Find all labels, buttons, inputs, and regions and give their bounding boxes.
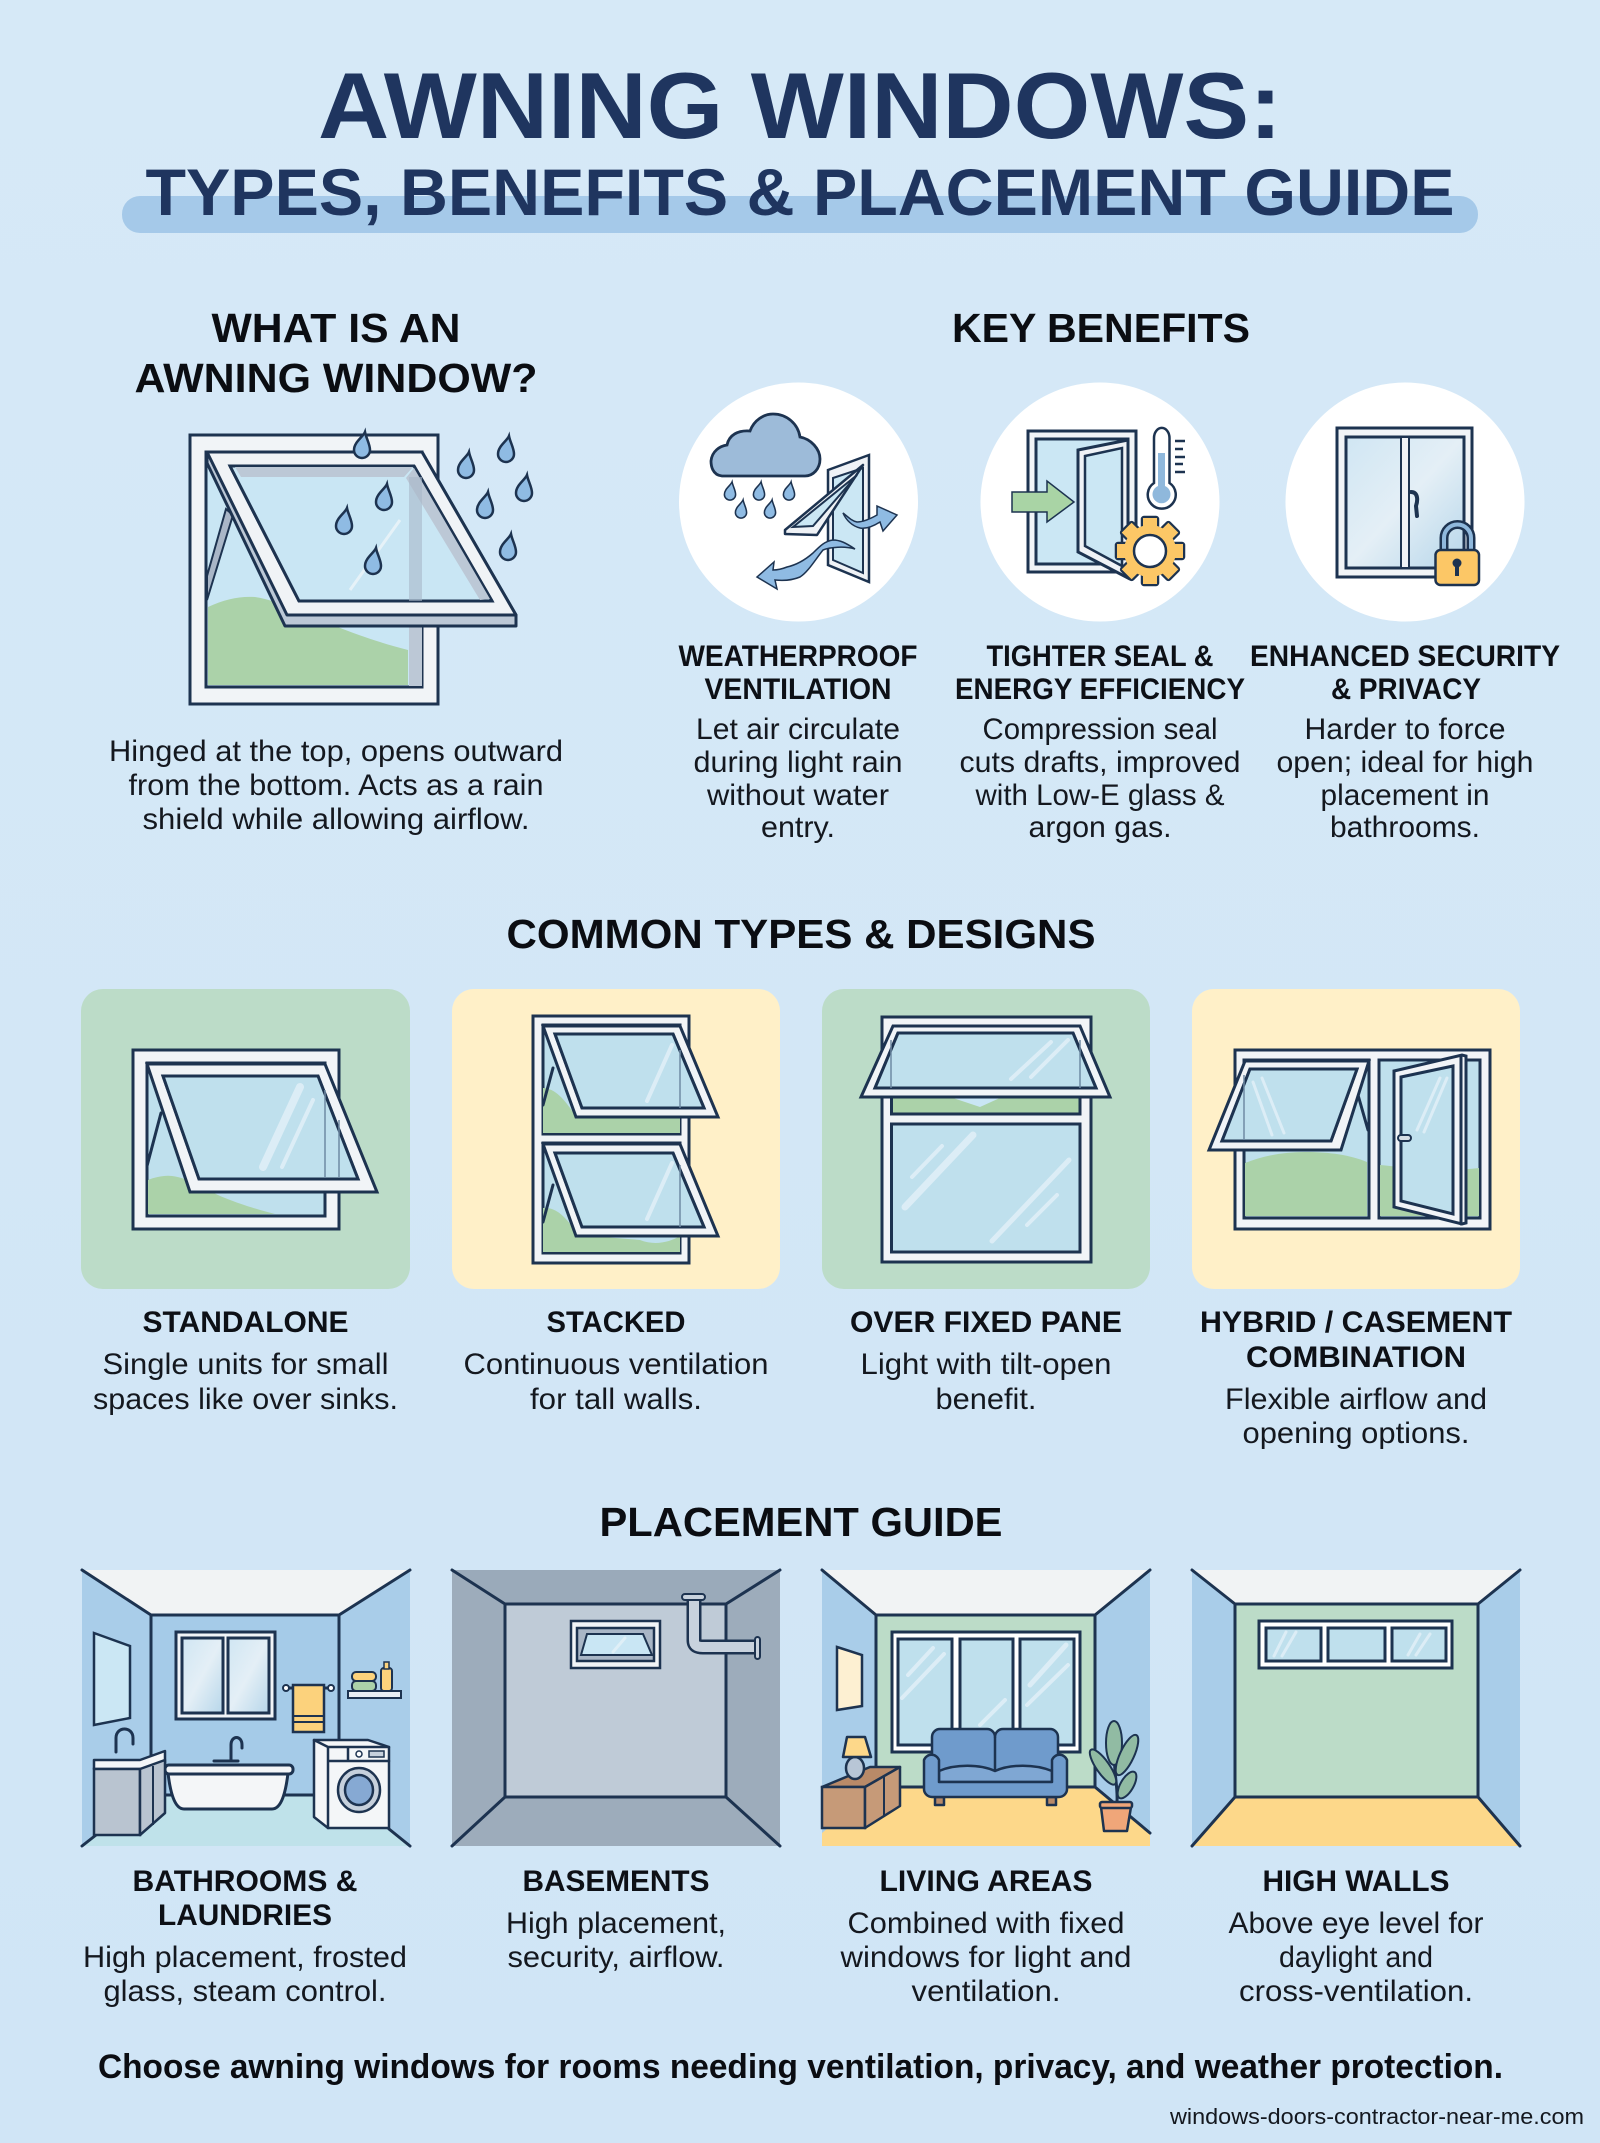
benefit: weatherproof ventilation bbox=[678, 382, 918, 844]
mirror bbox=[94, 1633, 130, 1725]
label: WEATHERPROOF bbox=[678, 640, 918, 673]
description: High placement, frosted bbox=[83, 1941, 407, 1974]
description: Above eye level for bbox=[1228, 1907, 1484, 1940]
label: STANDALONE bbox=[142, 1306, 348, 1339]
label: COMBINATION bbox=[1246, 1341, 1466, 1374]
window illustration bbox=[1209, 1050, 1490, 1229]
description bbox=[464, 1348, 768, 1416]
benefit: tighter seal and energy efficiency bbox=[955, 382, 1245, 844]
card background bbox=[81, 989, 410, 1289]
label bbox=[1250, 640, 1560, 706]
description bbox=[839, 1907, 1132, 2008]
type card: standalone bbox=[81, 989, 410, 1416]
description: with Low-E glass & bbox=[975, 779, 1224, 812]
frosted window bbox=[176, 1632, 275, 1719]
placement: living areas bbox=[822, 1570, 1150, 2008]
description: Flexible airflow and bbox=[1225, 1383, 1487, 1416]
icon: frosted window and padlock bbox=[1286, 382, 1524, 622]
label bbox=[132, 1865, 358, 1932]
description bbox=[1276, 713, 1534, 844]
description: entry. bbox=[761, 811, 835, 844]
description: from the bottom. Acts as a rain bbox=[128, 769, 544, 802]
footer takeaway: Choose awning windows for rooms needing ventilation, privacy, and weather protection. bbox=[98, 2048, 1503, 2086]
description: Let air circulate bbox=[696, 713, 900, 746]
label: HIGH WALLS bbox=[1262, 1865, 1450, 1898]
description: spaces like over sinks. bbox=[93, 1383, 398, 1416]
label: BATHROOMS & bbox=[132, 1865, 358, 1898]
description: Light with tilt-open bbox=[860, 1348, 1112, 1381]
washing machine bbox=[314, 1740, 389, 1828]
source url: windows-doors-contractor-near-me.com bbox=[1169, 2104, 1584, 2129]
label: STACKED bbox=[546, 1306, 686, 1339]
label bbox=[678, 640, 918, 706]
placement: high walls bbox=[1192, 1570, 1520, 2008]
description: Harder to force bbox=[1304, 713, 1506, 746]
description: opening options. bbox=[1242, 1417, 1470, 1450]
picture bbox=[837, 1647, 862, 1710]
type card: stacked bbox=[452, 989, 780, 1416]
small window bbox=[571, 1621, 660, 1668]
heading: what is an awning window bbox=[134, 305, 538, 401]
label: HYBRID / CASEMENT bbox=[1200, 1306, 1512, 1339]
description: Single units for small bbox=[102, 1348, 388, 1381]
description bbox=[109, 735, 563, 836]
window illustration bbox=[133, 1050, 377, 1229]
room illustration bbox=[822, 1570, 1150, 1846]
label: TIGHTER SEAL & bbox=[986, 640, 1214, 673]
description bbox=[1225, 1383, 1487, 1450]
vanity bbox=[94, 1729, 165, 1835]
triple window bbox=[892, 1632, 1080, 1752]
description: during light rain bbox=[694, 746, 902, 779]
description: Compression seal bbox=[982, 713, 1218, 746]
shelf with toiletries bbox=[348, 1662, 401, 1698]
clerestory window bbox=[1259, 1621, 1452, 1668]
label: ENHANCED SECURITY bbox=[1250, 640, 1560, 673]
illustration: open awning window in rain bbox=[190, 432, 532, 704]
towel bbox=[283, 1685, 334, 1732]
description: cuts drafts, improved bbox=[960, 746, 1240, 779]
description: security, airflow. bbox=[508, 1941, 724, 1974]
description: cross-ventilation. bbox=[1239, 1975, 1473, 2008]
card background bbox=[452, 989, 780, 1289]
sofa bbox=[924, 1729, 1067, 1805]
label bbox=[1200, 1306, 1512, 1374]
window illustration bbox=[533, 1016, 718, 1263]
description: open; ideal for high bbox=[1276, 746, 1534, 779]
icon: sealed window, thermometer and gear bbox=[980, 382, 1220, 622]
label: LAUNDRIES bbox=[158, 1899, 332, 1932]
subtitle highlight bar bbox=[122, 196, 1478, 233]
room illustration bbox=[1192, 1570, 1520, 1846]
description: ventilation. bbox=[912, 1975, 1060, 2008]
card background bbox=[1192, 989, 1520, 1289]
benefit: enhanced security and privacy bbox=[1250, 382, 1560, 844]
description: argon gas. bbox=[1028, 811, 1172, 844]
description: for tall walls. bbox=[530, 1383, 702, 1416]
description: Continuous ventilation bbox=[464, 1348, 768, 1381]
label bbox=[955, 640, 1245, 706]
description bbox=[83, 1941, 407, 2008]
gear bbox=[1116, 517, 1184, 585]
heading: what is an awning window: WHAT IS AN bbox=[212, 305, 460, 351]
label: & PRIVACY bbox=[1331, 673, 1481, 706]
card background bbox=[822, 989, 1150, 1289]
icon: cloud, rain and airflow bbox=[679, 382, 918, 622]
heading: common types and designs: COMMON TYPES & DESIGNS bbox=[506, 911, 1096, 957]
type card: over fixed pane bbox=[822, 989, 1150, 1416]
lamp bbox=[843, 1737, 871, 1779]
label: VENTILATION bbox=[704, 673, 892, 706]
cabinet bbox=[822, 1767, 900, 1828]
description bbox=[860, 1348, 1112, 1416]
description bbox=[694, 713, 902, 844]
description: glass, steam control. bbox=[104, 1975, 386, 2008]
heading: key benefits: KEY BENEFITS bbox=[952, 305, 1250, 351]
title bbox=[122, 53, 1478, 233]
description: Hinged at the top, opens outward bbox=[109, 735, 563, 768]
placement: bathrooms and laundries bbox=[82, 1570, 410, 2008]
title line: Awning Windows: AWNING WINDOWS: bbox=[318, 53, 1282, 158]
description: shield while allowing airflow. bbox=[142, 803, 530, 836]
heading: placement guide: PLACEMENT GUIDE bbox=[600, 1499, 1002, 1545]
heading: what is an awning window: AWNING WINDOW? bbox=[134, 355, 538, 401]
pipe bbox=[682, 1594, 760, 1659]
label: LIVING AREAS bbox=[880, 1865, 1092, 1898]
label: BASEMENTS bbox=[522, 1865, 710, 1898]
room illustration bbox=[82, 1570, 410, 1846]
plant bbox=[1086, 1721, 1143, 1831]
rain drops bbox=[336, 432, 532, 574]
description: without water bbox=[706, 779, 889, 812]
description: benefit. bbox=[936, 1383, 1036, 1416]
subtitle: TYPES, BENEFITS & PLACEMENT GUIDE bbox=[146, 155, 1454, 229]
description bbox=[960, 713, 1240, 844]
description: daylight and bbox=[1279, 1941, 1433, 1974]
description: bathrooms. bbox=[1330, 811, 1480, 844]
description bbox=[93, 1348, 398, 1416]
description: High placement, bbox=[506, 1907, 726, 1940]
label: ENERGY EFFICIENCY bbox=[955, 673, 1245, 706]
type card: hybrid casement combination bbox=[1192, 989, 1520, 1450]
description: placement in bbox=[1320, 779, 1490, 812]
placement: basements bbox=[452, 1570, 780, 1974]
bathtub bbox=[165, 1738, 293, 1809]
window illustration bbox=[861, 1017, 1110, 1262]
label: OVER FIXED PANE bbox=[850, 1306, 1122, 1339]
room illustration bbox=[452, 1570, 780, 1846]
description bbox=[506, 1907, 726, 1974]
description: windows for light and bbox=[839, 1941, 1132, 1974]
panel: what is an awning window bbox=[109, 305, 563, 836]
description bbox=[1228, 1907, 1484, 2008]
description: Combined with fixed bbox=[848, 1907, 1124, 1940]
